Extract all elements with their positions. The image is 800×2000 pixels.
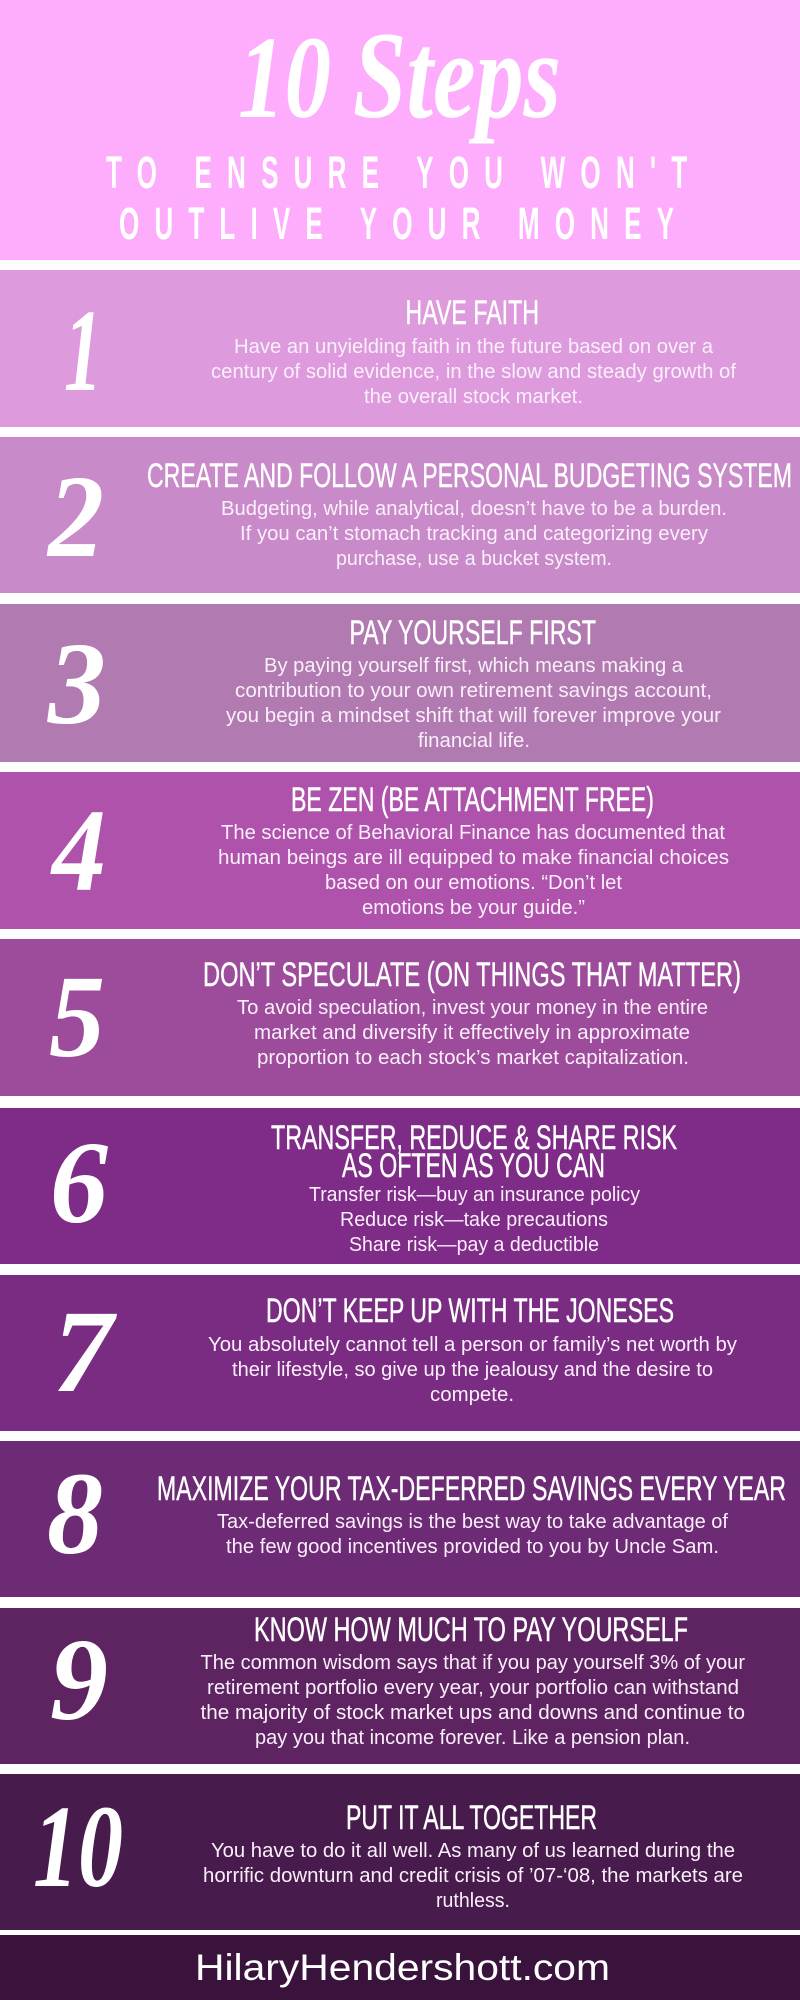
panel: step 2 [0,437,800,593]
text: step 6 body [309,1184,640,1256]
text: step 5 body: To avoid speculation, invest your money in the entire [237,997,708,1019]
text: step 2 body: purchase, use a bucket system. [336,548,612,570]
text: step 3 body: contribution to your own retirement savings account, [235,680,712,702]
text: step 6 body: Transfer risk—buy an insurance policy [309,1184,640,1206]
text: step 8 body: Tax-deferred savings is the best way to take advantage of [217,1511,728,1533]
panel: step 6 [0,1108,800,1264]
text: step 8 body: the few good incentives provided to you by Uncle Sam. [226,1536,719,1558]
text: step 7 body: their lifestyle, so give up the jealousy and the desire to [232,1359,713,1381]
subtitle [106,148,688,249]
number 7: 7 [53,1286,117,1417]
website: HilaryHendershott.com [195,1947,610,1988]
number 10: 10 [33,1781,123,1912]
title: Steps [353,7,561,144]
text: step 8 body [217,1511,728,1558]
text: step 9 body [200,1652,745,1749]
text: step 7 body: compete. [430,1384,514,1406]
number 3: 3 [47,618,106,749]
panel: footer [0,1935,800,2000]
panel: step 4 [0,772,800,929]
number 5: 5 [49,951,105,1082]
text: step 3 body [226,655,721,752]
text: step 5 body: market and diversify it effectively in approximate [254,1022,690,1044]
text: step 1 body: Have an unyielding faith in the future based on over a [234,336,714,358]
text: step 1 body [211,336,736,408]
text: step 4 body: based on our emotions. “Don’t let [325,872,622,894]
text: step 7 body: You absolutely cannot tell a person or family’s net worth by [208,1334,737,1356]
panel: step 8 [0,1441,800,1597]
heading: pay yourself first: PAY YOURSELF FIRST [350,614,596,652]
text: step 9 body: pay you that income forever. Like a pension plan. [255,1727,690,1749]
text: step 7 body [208,1334,737,1406]
text: step 1 body: century of solid evidence, in the slow and steady growth of [211,361,736,383]
panel: step 5 [0,939,800,1096]
heading: transfer, reduce and share risk [271,1119,677,1185]
text: step 4 body: human beings are ill equipped to make financial choices [218,847,729,869]
text: step 4 body: emotions be your guide.” [362,897,585,919]
text: step 6 body: Reduce risk—take precautions [340,1209,608,1231]
number 9: 9 [50,1614,108,1745]
text: step 2 body: Budgeting, while analytical, doesn’t have to be a burden. [221,498,727,520]
text: step 5 body: proportion to each stock’s market capitalization. [257,1047,689,1069]
text: step 10 body: ruthless. [436,1890,510,1912]
subtitle: OUTLIVE YOUR MONEY [119,199,674,249]
heading: put it all together: PUT IT ALL TOGETHER [346,1799,597,1837]
text: step 10 body: You have to do it all well. As many of us learned during the [211,1840,735,1862]
text: step 9 body: The common wisdom says that if you pay yourself 3% of your [200,1652,745,1674]
title: 10 [238,12,331,143]
text: step 3 body: financial life. [418,730,530,752]
text: step 1 body: the overall stock market. [364,386,583,408]
heading: have faith: HAVE FAITH [406,294,539,332]
heading: transfer, reduce and share risk: AS OFTEN AS YOU CAN [342,1147,605,1185]
text: step 2 body [221,498,727,570]
subtitle: TO ENSURE YOU WON'T [106,148,688,198]
number 8: 8 [47,1448,103,1579]
number 6: 6 [50,1117,108,1248]
text: step 4 body: The science of Behavioral Finance has documented that [221,822,725,844]
text: step 5 body [237,997,708,1069]
number 1: 1 [64,285,102,416]
text: step 9 body: retirement portfolio every year, your portfolio can withstand [207,1677,739,1699]
panel: step 3 [0,604,800,762]
panel: step 9 [0,1608,800,1764]
text: step 3 body: By paying yourself first, which means making a [264,655,684,677]
text: step 10 body: horrific downturn and credit crisis of ’07-‘08, the markets are [203,1865,743,1887]
text: step 9 body: the majority of stock market ups and downs and continue to [200,1702,745,1724]
title [238,7,561,144]
text: step 2 body: If you can’t stomach tracking and categorizing every [240,523,708,545]
panel: step 1 [0,270,800,427]
panel: step 7 [0,1275,800,1431]
text: step 6 body: Share risk—pay a deductible [349,1234,599,1256]
number 2: 2 [46,451,104,582]
number 4: 4 [50,785,106,916]
text: step 4 body [218,822,729,919]
panel: header [0,0,800,260]
panel: step 10 [0,1774,800,1930]
text: step 3 body: you begin a mindset shift that will forever improve your [226,705,721,727]
text: step 10 body [203,1840,743,1912]
